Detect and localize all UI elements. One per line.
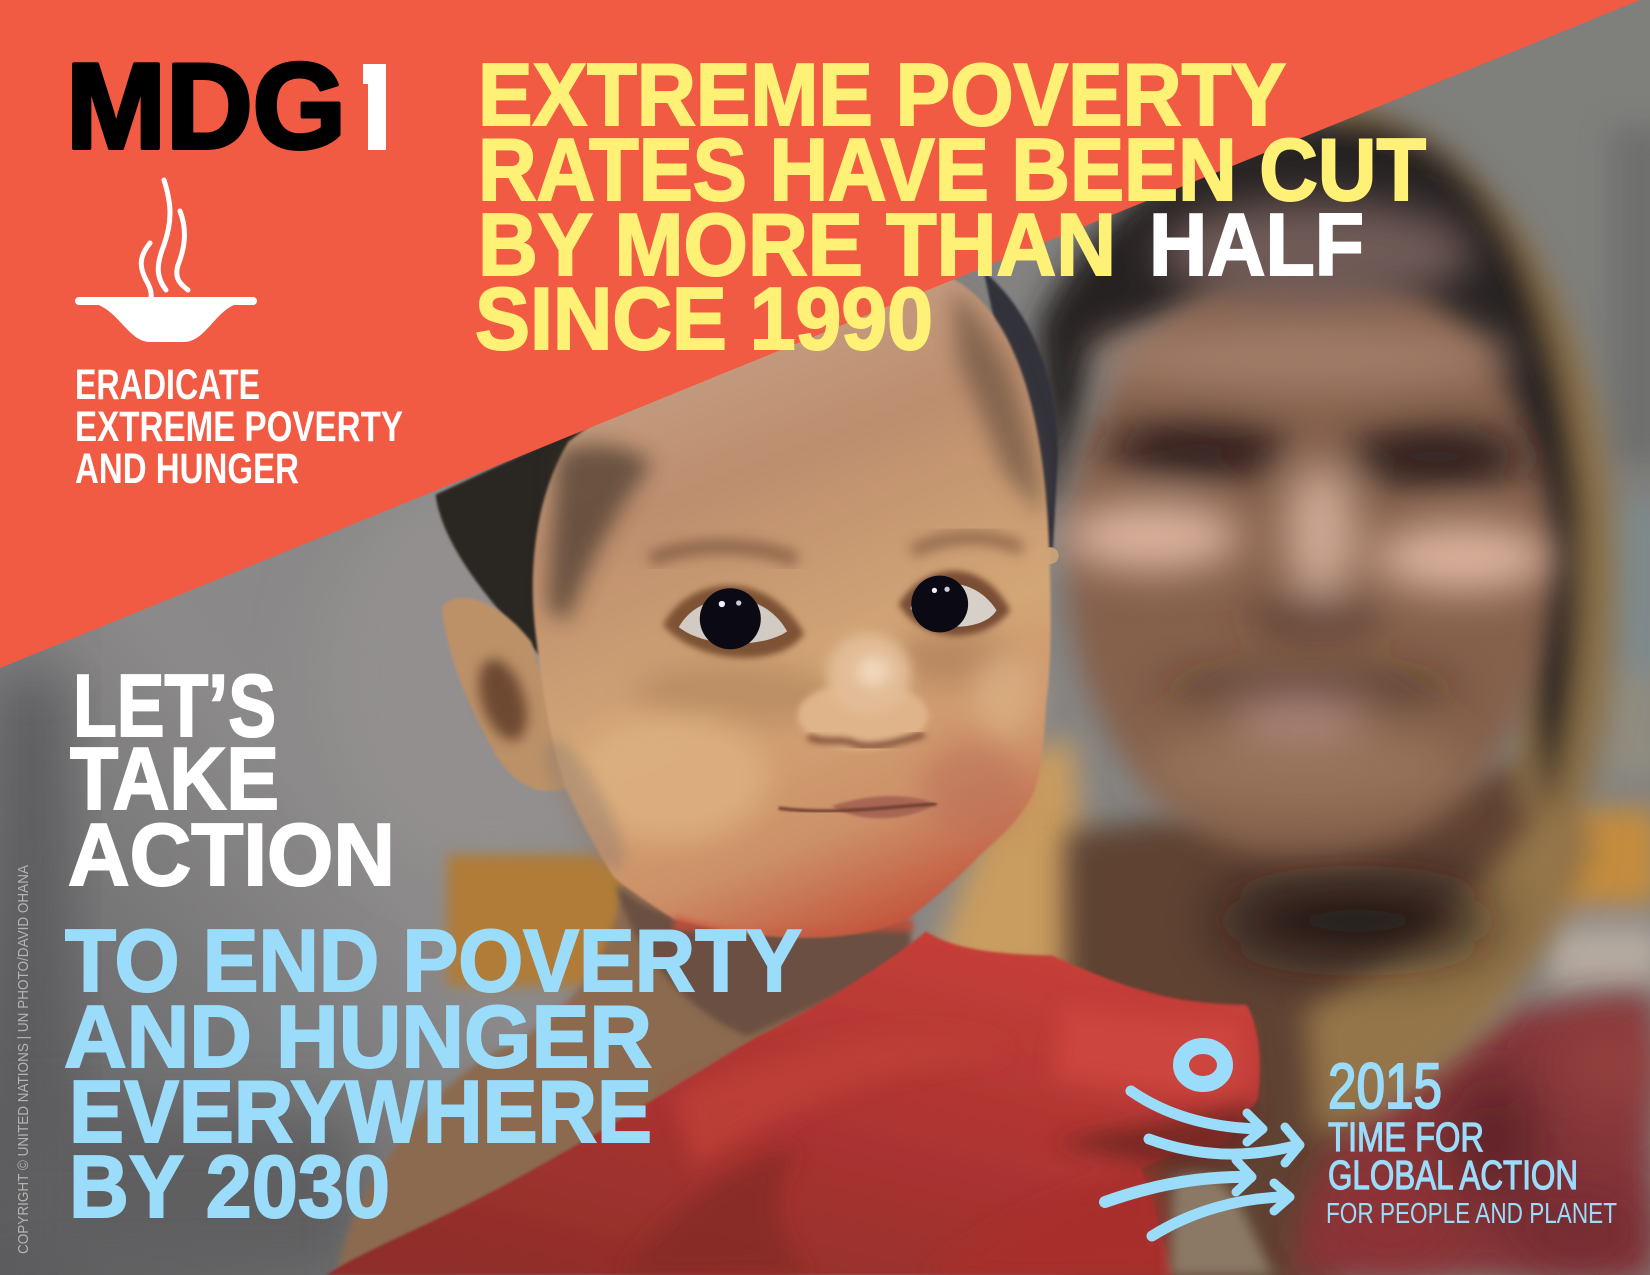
headline: extreme poverty rates cut by more than half [475, 45, 1426, 368]
warm strip between child and mother [926, 737, 1094, 979]
MDG1 logo: MDG [66, 38, 346, 174]
child brows [650, 538, 1022, 560]
goal text: eradicate extreme poverty and hunger: AND HUNGER [75, 445, 299, 493]
red diagonal panel [0, 0, 1640, 668]
campaign text: 2015 time for global action for people and planet [1326, 1050, 1617, 1230]
headline: extreme poverty rates cut by more than half: BY MORE THAN [478, 195, 1116, 294]
child shoulder and neck [337, 884, 916, 1275]
child left eye [663, 585, 804, 658]
background right wall colours [1545, 126, 1650, 987]
goal text: eradicate extreme poverty and hunger: ERADICATE [75, 361, 260, 409]
child nose [798, 633, 928, 749]
mother chin shadow [1221, 885, 1494, 957]
photo credit: COPYRIGHT © UNITED NATIONS | UN PHOTO/DAVID OHANA [15, 865, 32, 1254]
child hair back [436, 426, 673, 673]
headline: extreme poverty rates cut by more than half: RATES HAVE BEEN CUT [478, 120, 1426, 219]
hair [1037, 118, 1582, 821]
campaign text: 2015 time for global action for people and planet: TIME FOR [1328, 1114, 1484, 1160]
call to action: let's take action [68, 656, 395, 904]
text: 1 [369, 58, 385, 170]
headline: extreme poverty rates cut by more than half: HALF [1149, 195, 1364, 294]
call to action: let's take action: TAKE [70, 729, 279, 828]
child red garment [326, 931, 1260, 1275]
headline: extreme poverty rates cut by more than half: SINCE 1990 [475, 269, 933, 368]
goal statement: end poverty and hunger by 2030: AND HUNGER [64, 987, 652, 1086]
garment folds [621, 1005, 1257, 1275]
mother face base [1066, 263, 1554, 863]
icon: bowl of hot soup [79, 180, 253, 342]
call to action: let's take action: ACTION [68, 805, 395, 904]
campaign text: 2015 time for global action for people and planet: 2015 [1328, 1050, 1442, 1122]
goal statement: end poverty and hunger by 2030 [64, 911, 802, 1236]
goal text: eradicate extreme poverty and hunger: EXTREME POVERTY [75, 403, 403, 451]
scarf [1326, 100, 1615, 842]
child [326, 271, 1273, 1275]
child ear [442, 547, 1059, 791]
goal statement: end poverty and hunger by 2030: BY 2030 [69, 1137, 390, 1236]
mother neck and lower body [1065, 758, 1557, 1275]
child right eye [899, 571, 1010, 636]
background orange panel [447, 854, 626, 986]
icon: 2015 time for global action logo [1105, 1046, 1300, 1236]
child skin shading [531, 289, 1042, 934]
goal statement: end poverty and hunger by 2030: TO END POVERTY [65, 911, 802, 1010]
headline: extreme poverty rates cut by more than half: EXTREME POVERTY [478, 45, 1286, 144]
child face [533, 276, 1051, 938]
campaign text: 2015 time for global action for people and planet: GLOBAL ACTION [1328, 1152, 1578, 1198]
goal statement: end poverty and hunger by 2030: EVERYWHERE [69, 1062, 652, 1161]
child mouth [779, 796, 937, 818]
mother, out of focus [1037, 100, 1650, 1275]
child hand blur [1170, 1175, 1273, 1275]
goal text: eradicate extreme poverty and hunger [75, 361, 403, 493]
call to action: let's take action: LET’S [73, 656, 276, 755]
